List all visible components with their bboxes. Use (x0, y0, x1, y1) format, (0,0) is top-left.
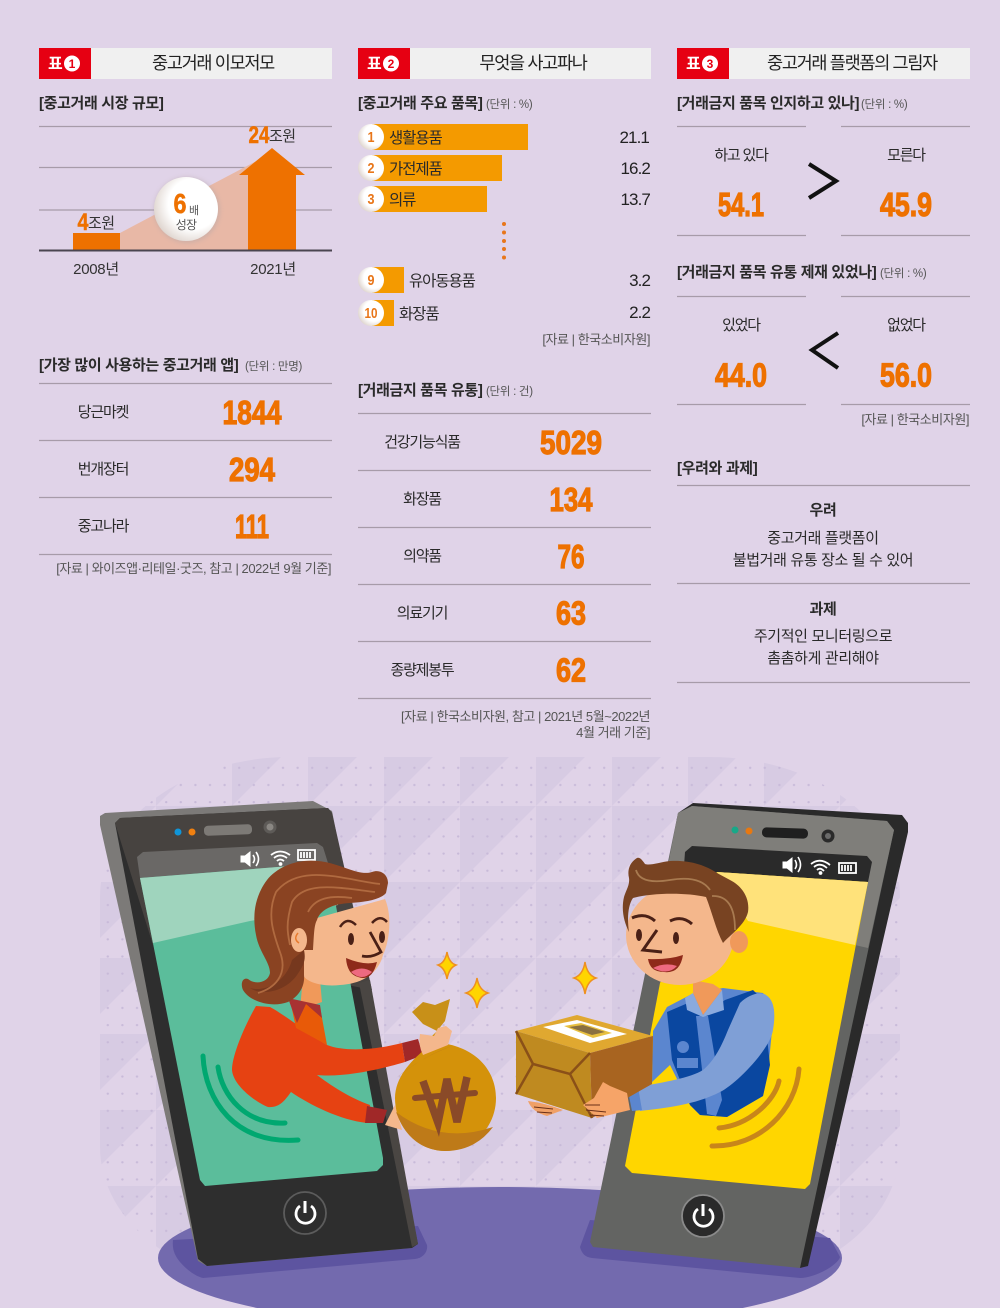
comparison: awareness: 모른다 (887, 147, 926, 164)
bar chart: main items: 2.2 (629, 303, 650, 322)
bar chart: main items: 10 (364, 305, 378, 322)
source: banned items: [자료 | 한국소비자원, 참고 | 2021년 5월~2022년 (401, 709, 650, 724)
bar chart: main items: 9 (368, 272, 374, 289)
table: banned items (358, 414, 651, 698)
bar chart: main items: 21.1 (620, 128, 649, 147)
table: app users: 111 (235, 508, 269, 545)
comparison: awareness: 54.1 (718, 186, 764, 223)
illustration: right phone (580, 803, 908, 1278)
chart: market growth arrow (39, 122, 332, 278)
text block: concerns and tasks: 주기적인 모니터링으로 (754, 628, 893, 645)
chart: market growth arrow: 24 (248, 122, 270, 149)
chart: market growth arrow: 2008년 (73, 261, 119, 278)
comparison: awareness: 하고 있다 (714, 147, 769, 164)
source: table 3: [자료 | 한국소비자원] (861, 412, 969, 427)
panel: table 1 header: 중고거래 이모저모 (152, 53, 275, 73)
table: app users: 294 (229, 451, 276, 488)
chart: market growth arrow: 성장 (176, 218, 197, 232)
chart: market growth arrow: 2021년 (250, 261, 296, 278)
table: banned items: 의약품 (403, 548, 441, 565)
text block: concerns and tasks: 중고거래 플랫폼이 (767, 530, 879, 547)
table: banned items: 134 (550, 481, 593, 518)
heading: banned items: (단위 : 건) (486, 385, 533, 398)
panel: table 3 header: 중고거래 플랫폼의 그림자 (767, 53, 938, 73)
text block: concerns and tasks (677, 486, 970, 682)
heading: awareness: [거래금지 품목 인지하고 있나] (677, 95, 859, 112)
panel: table 2 header: 표 (367, 56, 382, 73)
panel: table 2 header: 무엇을 사고파나 (479, 53, 588, 73)
comparison: awareness: 45.9 (880, 186, 932, 223)
table: banned items: 76 (558, 538, 584, 575)
icon: green motion arcs (203, 1056, 298, 1140)
heading: main items: (단위 : %) (486, 98, 533, 111)
heading: awareness: (단위 : %) (861, 98, 908, 111)
bar chart: main items: 3.2 (629, 271, 650, 290)
illustration: woman (232, 861, 423, 1130)
icon: sparkles (438, 952, 596, 1008)
table: app users: 당근마켓 (78, 404, 129, 421)
icon: status bar right (783, 857, 856, 874)
bar chart: main items: 의류 (389, 191, 416, 209)
table: banned items: 건강기능식품 (384, 434, 460, 451)
bar chart: main items: 2 (368, 160, 374, 177)
heading: sanctions: [거래금지 품목 유통 제재 있었나] (677, 264, 877, 281)
text block: concerns and tasks: 과제 (810, 601, 836, 618)
table: banned items: 62 (556, 652, 586, 688)
comparison: sanctions (677, 296, 970, 404)
chart: market growth arrow: 6 (174, 188, 186, 219)
chart: market growth arrow: 조원 (269, 128, 295, 145)
bar chart: main items: 가전제품 (389, 160, 442, 178)
chart: market growth arrow: 조원 (88, 215, 114, 232)
heading: most used apps: [가장 많이 사용하는 중고거래 앱] (39, 357, 239, 374)
heading: most used apps: (단위 : 만명) (245, 360, 302, 373)
panel: table 1 header: 1 (69, 57, 76, 71)
panel: table 3 header: 표 (686, 56, 701, 73)
icon: yellow-brown motion arcs (712, 1069, 799, 1146)
source: banned items (401, 709, 650, 740)
source: banned items: 4월 거래 기준] (576, 725, 650, 740)
heading: banned items: [거래금지 품목 유통] (358, 382, 483, 399)
table: banned items: 종량제봉투 (390, 662, 455, 679)
table: app users (39, 384, 332, 554)
comparison: sanctions: 있었다 (722, 317, 761, 334)
panel: table 2 header (358, 48, 651, 79)
panel: table 1 header (39, 48, 332, 79)
illustration: money bag (395, 999, 496, 1151)
bar chart: main items: 1 (368, 129, 374, 146)
comparison: awareness (677, 126, 970, 236)
table: banned items: 화장품 (403, 491, 441, 508)
comparison: sanctions: 없었다 (887, 317, 926, 334)
heading: concerns and tasks: [우려와 과제] (677, 460, 758, 477)
bar chart: main items: 16.2 (620, 159, 650, 178)
illustration: man (623, 858, 774, 1117)
panel: table 3 header: 3 (707, 57, 714, 71)
icon: status bar left (241, 850, 315, 866)
bar chart: main items: 3 (368, 191, 374, 208)
panel: table 1 header: 표 (48, 56, 63, 73)
comparison: sanctions: 56.0 (880, 356, 932, 394)
source: table 1: [자료 | 와이즈앱·리테일·굿즈, 참고 | 2022년 9월 기준] (56, 561, 331, 576)
text block: concerns and tasks: 우려 (810, 502, 836, 519)
icon: power button left (284, 1192, 326, 1234)
heading: market size: [중고거래 시장 규모] (39, 95, 164, 112)
illustration: left phone (100, 801, 427, 1278)
bar chart: main items: 화장품 (399, 305, 439, 323)
table: app users: 중고나라 (78, 518, 130, 535)
text block: concerns and tasks: 촘촘하게 관리해야 (767, 650, 879, 667)
text block: concerns and tasks: 불법거래 유통 장소 될 수 있어 (733, 552, 913, 569)
table: app users: 1844 (222, 394, 282, 431)
illustration: parcel box (516, 1015, 653, 1118)
panel: table 2 header: 2 (388, 57, 395, 71)
chart: market growth arrow: 배 (189, 204, 199, 217)
table: app users: 번개장터 (78, 461, 128, 478)
chart: market growth arrow: 4 (78, 209, 89, 236)
table: banned items: 63 (556, 594, 586, 632)
bar chart: main items: 13.7 (620, 190, 650, 209)
icon: power button right (682, 1195, 724, 1237)
heading: main items: [중고거래 주요 품목] (358, 95, 483, 112)
panel: table 3 header (677, 48, 970, 79)
heading: sanctions: (단위 : %) (880, 267, 927, 280)
table: banned items: 5029 (540, 424, 602, 461)
table: banned items: 의료기기 (397, 605, 447, 622)
illustration: patterned backdrop (100, 757, 900, 1308)
bar chart: main items (358, 124, 650, 326)
source: main items: [자료 | 한국소비자원] (542, 332, 650, 347)
comparison: sanctions: 44.0 (715, 356, 767, 394)
bar chart: main items: 유아동용품 (409, 272, 476, 290)
bar chart: main items: 생활용품 (389, 129, 442, 147)
